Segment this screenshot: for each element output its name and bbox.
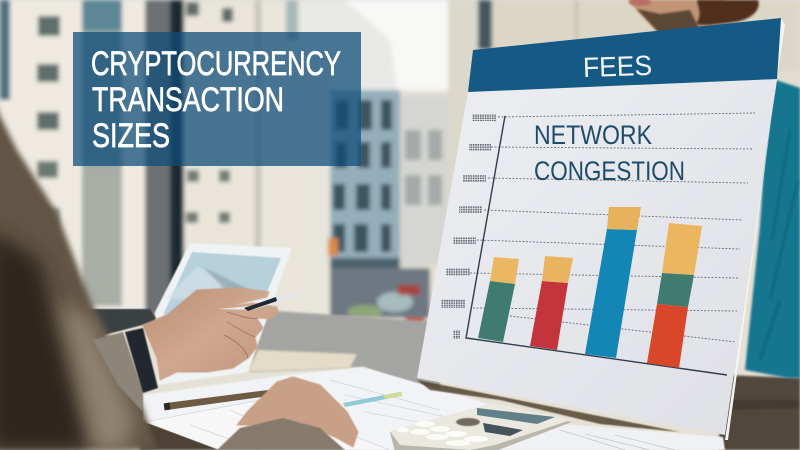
calculator [390, 403, 572, 450]
header band [468, 18, 781, 92]
bar 1 [478, 257, 519, 342]
bar 4 [647, 223, 702, 368]
bar 3 [585, 207, 641, 358]
title text: SIZES [92, 117, 170, 155]
street [330, 268, 430, 318]
dark chair [84, 309, 156, 336]
presentation board [417, 18, 785, 440]
left building [0, 0, 145, 320]
document under right hand [143, 367, 560, 450]
hand holding pen [143, 288, 278, 380]
board shadow [417, 380, 680, 432]
right wall and pole [448, 0, 480, 300]
title text: TRANSACTION [92, 81, 284, 119]
right hand [237, 377, 358, 447]
sky [300, 0, 460, 90]
chart axes [466, 116, 727, 375]
title panel [73, 32, 361, 166]
middle building [184, 0, 302, 320]
lower right paper [500, 420, 725, 450]
title text: CRYPTOCURRENCY [91, 45, 341, 83]
face [628, 0, 725, 34]
grid lines [470, 113, 755, 342]
pen on table [166, 390, 269, 410]
board back edge [725, 18, 785, 440]
board sheet [417, 79, 777, 435]
silver pen [217, 291, 298, 311]
chart title: NETWORK [534, 120, 652, 150]
watch band [125, 328, 158, 393]
chart title [534, 120, 685, 186]
highlighted row [343, 392, 402, 407]
dark fold [0, 230, 90, 450]
title text [91, 45, 341, 155]
lower sleeve [217, 418, 345, 450]
window frame [145, 0, 170, 315]
teal shirt [745, 78, 800, 378]
person behind board [628, 0, 800, 378]
foreground coat and arm [0, 96, 358, 450]
curly hair [696, 0, 759, 25]
small tan paper [248, 350, 357, 372]
light fold [60, 300, 135, 450]
chart title: CONGESTION [534, 156, 685, 186]
blue building [300, 50, 335, 320]
tick labels [441, 114, 496, 339]
sleeve [93, 332, 143, 412]
bar 2 [530, 256, 573, 350]
shoulder [0, 96, 157, 450]
tablet [155, 243, 292, 385]
table surface [135, 310, 800, 450]
header text: FEES [582, 50, 653, 83]
